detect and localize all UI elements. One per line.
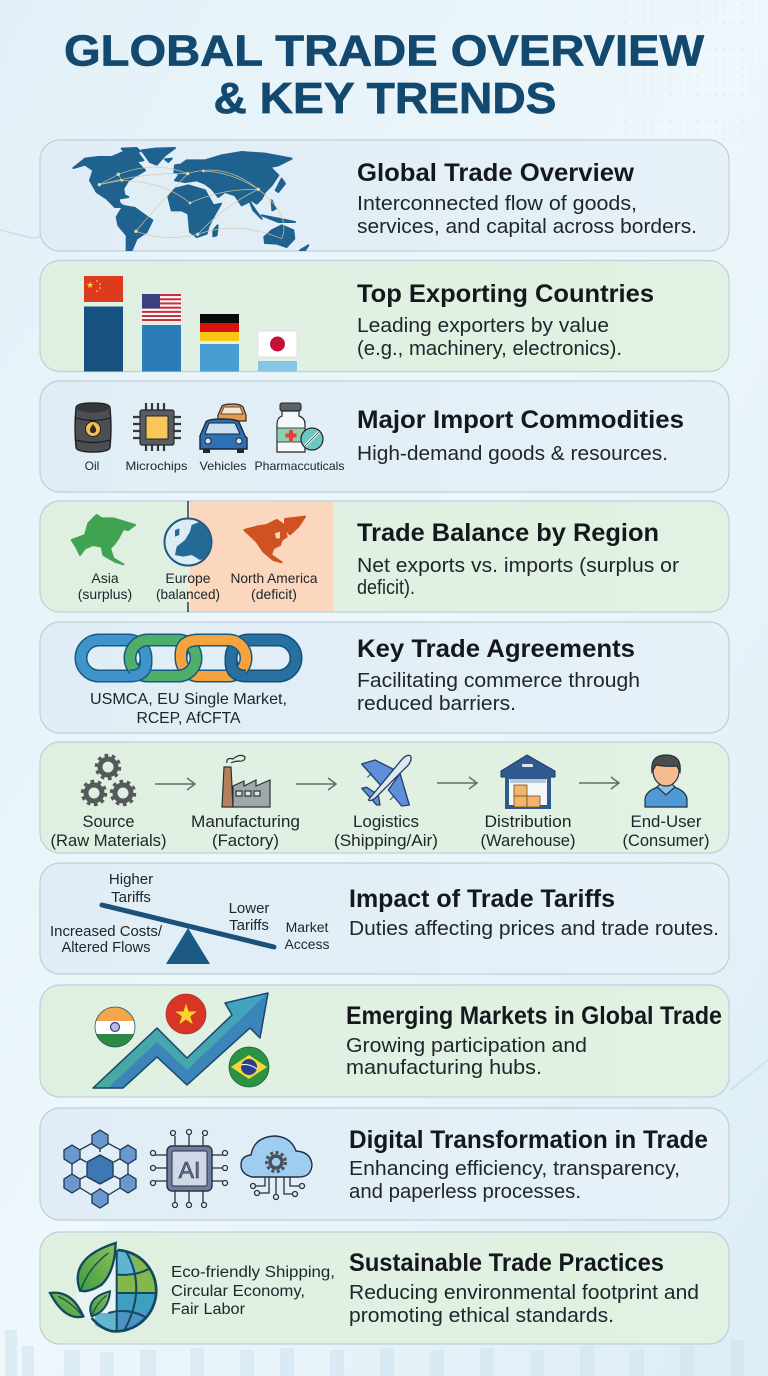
description: Growing participation and — [346, 1034, 587, 1057]
practices list: Circular Economy, — [171, 1283, 305, 1300]
description — [357, 554, 679, 599]
world map with trade routes — [73, 148, 308, 250]
deficit zone — [190, 502, 333, 612]
heading: Digital Transformation in Trade — [349, 1126, 708, 1154]
panel: key trade agreements — [40, 622, 729, 733]
arrow — [437, 777, 477, 789]
region captions: (deficit) — [251, 586, 297, 602]
description: manufacturing hubs. — [346, 1056, 542, 1079]
description: (e.g., machinery, electronics). — [357, 337, 622, 360]
icon: oil barrel — [75, 403, 111, 452]
panel: supply chain flow — [40, 742, 729, 853]
bar chart with flags — [84, 276, 297, 372]
seesaw labels — [50, 871, 330, 956]
arrow — [579, 777, 619, 789]
flag: India — [95, 1007, 135, 1048]
description — [357, 314, 622, 360]
seesaw labels: Tariffs — [229, 917, 269, 934]
map: Asia — [72, 515, 135, 564]
icon: factory — [222, 755, 270, 807]
icon: Europe globe — [164, 518, 215, 566]
icon: blockchain network — [64, 1130, 136, 1208]
description — [349, 1157, 680, 1203]
description: Duties affecting prices and trade routes. — [349, 917, 719, 940]
description: Reducing environmental footprint and — [349, 1281, 699, 1304]
description: Interconnected flow of goods, — [357, 192, 637, 215]
practices list: Fair Labor — [171, 1301, 245, 1318]
panel: global trade overview — [40, 140, 729, 251]
agreement list: USMCA, EU Single Market, — [90, 691, 287, 708]
panel: sustainable trade — [40, 1232, 729, 1344]
arrow — [296, 778, 336, 790]
description: reduced barriers. — [357, 692, 516, 715]
description: deficit). — [357, 576, 415, 599]
flow captions: (Factory) — [212, 832, 279, 850]
icon captions: Oil — [85, 459, 99, 473]
flow captions — [50, 813, 710, 850]
heading: Trade Balance by Region — [357, 519, 659, 547]
flow captions: Source — [82, 813, 134, 831]
seesaw labels: Higher — [109, 871, 153, 888]
description — [349, 1281, 699, 1327]
description: Net exports vs. imports (surplus or — [357, 554, 679, 577]
seesaw labels: Lower — [229, 900, 269, 917]
icon: pharmaceuticals — [277, 403, 323, 452]
icon: cloud — [241, 1136, 312, 1200]
practices list: Eco-friendly Shipping, — [171, 1264, 335, 1281]
description: Leading exporters by value — [357, 314, 609, 337]
seesaw icon — [102, 905, 274, 964]
icon: warehouse — [501, 755, 555, 807]
heading: Impact of Trade Tariffs — [349, 885, 615, 913]
flow captions: Logistics — [353, 813, 419, 831]
region captions: North America — [230, 570, 318, 586]
icon: person — [645, 755, 687, 807]
heading: Global Trade Overview — [357, 159, 635, 187]
icon captions: Vehicles — [200, 459, 246, 473]
panel: digital transformation — [40, 1108, 729, 1220]
growth arrow — [93, 993, 268, 1088]
icon: AI chip: AI — [179, 1157, 200, 1183]
icon: vehicles — [200, 404, 247, 453]
icon captions — [85, 459, 344, 473]
flow captions: End-User — [630, 813, 702, 831]
panel: top exporting countries — [40, 260, 729, 372]
flag: Vietnam: ★ — [173, 999, 199, 1030]
heading: Major Import Commodities — [357, 406, 684, 434]
seesaw labels: Altered Flows — [62, 939, 150, 956]
region captions: Asia — [91, 570, 119, 586]
icon: plane — [362, 755, 411, 806]
region captions: Europe — [165, 570, 211, 586]
seesaw labels: Increased Costs/ — [50, 923, 163, 940]
region captions: (balanced) — [156, 586, 220, 602]
agreement list: RCEP, AfCFTA — [136, 710, 241, 727]
chain links — [81, 640, 296, 676]
flow captions: (Raw Materials) — [50, 832, 166, 850]
icon: leafy globe — [50, 1243, 158, 1333]
panel: major import commodities — [40, 381, 729, 492]
seesaw labels: Market — [286, 919, 328, 935]
seesaw labels: Tariffs — [111, 889, 151, 906]
flow captions: (Warehouse) — [480, 832, 576, 850]
panel: trade balance by region — [40, 501, 729, 612]
description: Enhancing efficiency, transparency, — [349, 1157, 680, 1180]
description: and paperless processes. — [349, 1180, 581, 1203]
icon: microchip — [133, 403, 181, 451]
map: North America — [244, 517, 305, 562]
flow captions: (Shipping/Air) — [334, 832, 438, 850]
description: Facilitating commerce through — [357, 669, 640, 692]
heading: Sustainable Trade Practices — [349, 1249, 664, 1277]
flow captions: Manufacturing — [191, 813, 300, 831]
flag: Brazil — [229, 1047, 269, 1087]
flow captions: (Consumer) — [622, 832, 710, 850]
region captions: (surplus) — [78, 586, 132, 602]
title: GLOBAL TRADE OVERVIEW — [64, 26, 705, 76]
icon: gears — [82, 756, 134, 804]
heading: Emerging Markets in Global Trade — [346, 1002, 722, 1030]
seesaw labels: Access — [284, 936, 330, 952]
description: promoting ethical standards. — [349, 1304, 614, 1327]
title — [64, 26, 705, 123]
flag: Japan — [258, 331, 297, 357]
flow captions: Distribution — [484, 813, 572, 831]
description: High-demand goods & resources. — [357, 442, 668, 465]
description — [357, 192, 697, 238]
flag: Vietnam — [166, 994, 206, 1034]
description: services, and capital across borders. — [357, 215, 697, 238]
title: & KEY TRENDS — [214, 74, 556, 123]
description — [346, 1034, 587, 1079]
icon: AI chip — [150, 1130, 228, 1208]
flag: China — [84, 276, 123, 302]
panel: impact of trade tariffs — [40, 863, 729, 974]
region captions — [78, 570, 318, 602]
heading: Key Trade Agreements — [357, 635, 635, 663]
flag: China: ★ — [86, 280, 94, 290]
flag: Germany — [200, 314, 239, 341]
heading: Top Exporting Countries — [357, 280, 654, 308]
flag: USA — [142, 294, 181, 321]
practices list — [171, 1264, 335, 1318]
description — [357, 669, 640, 715]
panel: emerging markets — [40, 985, 729, 1097]
icon captions: Microchips — [126, 459, 188, 473]
icon captions: Pharmaccuticals — [254, 459, 344, 473]
arrow — [155, 778, 195, 790]
agreement list — [90, 691, 287, 727]
